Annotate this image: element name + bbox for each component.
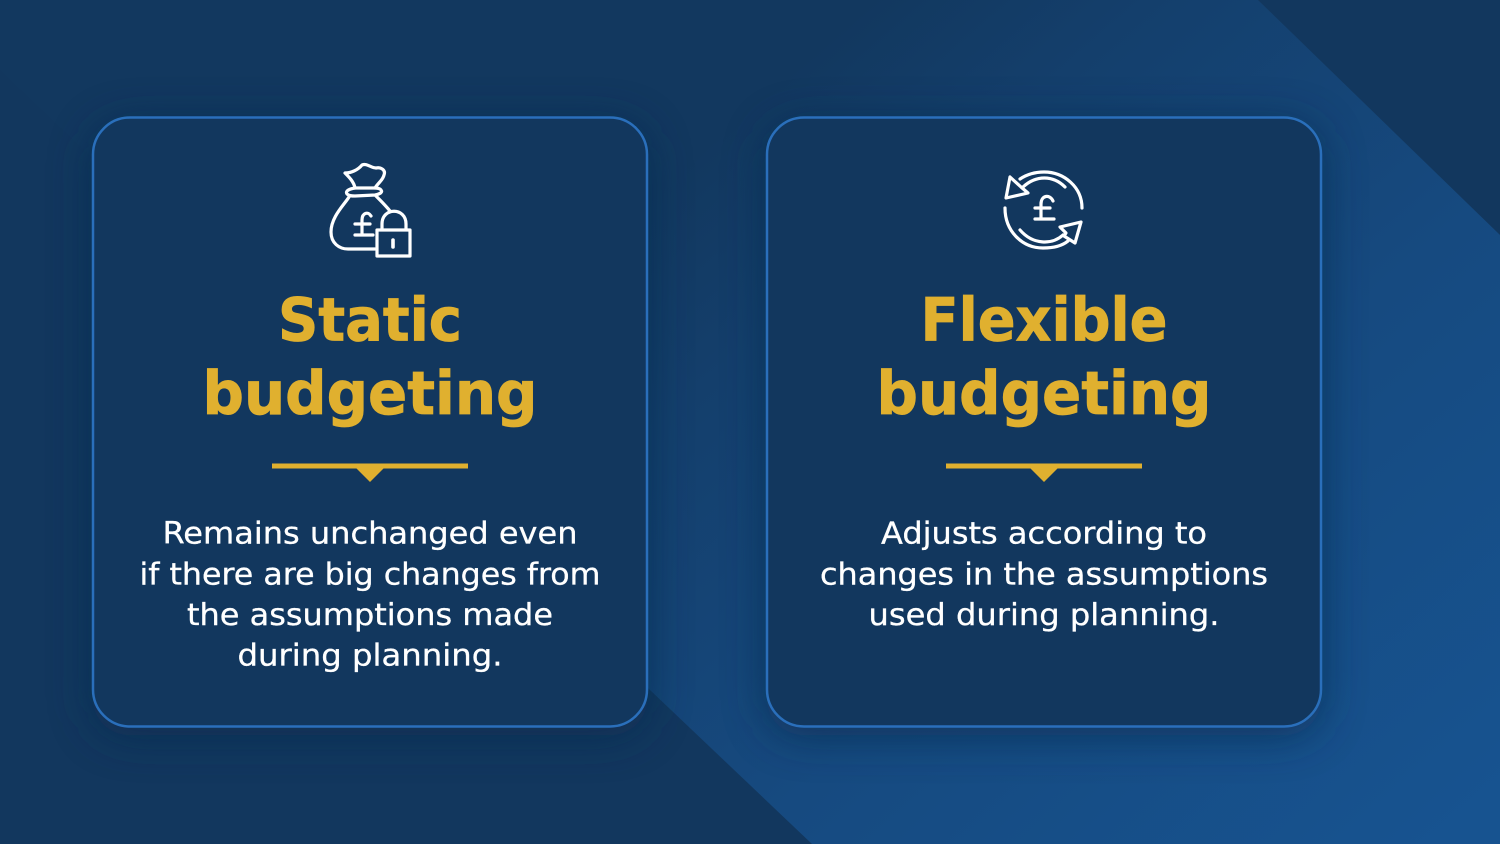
heading: budgeting xyxy=(202,359,538,429)
divider with pointer xyxy=(946,464,1142,482)
description: if there are big changes from xyxy=(140,558,600,592)
heading xyxy=(202,286,538,429)
heading: Flexible xyxy=(920,286,1168,356)
heading: budgeting xyxy=(876,359,1212,429)
icon: circular arrows with pound xyxy=(1005,172,1082,248)
description xyxy=(140,516,600,674)
heading xyxy=(876,286,1212,429)
description: the assumptions made xyxy=(187,598,553,633)
description: used during planning. xyxy=(868,598,1220,633)
card outline xyxy=(93,118,647,726)
description: Adjusts according to xyxy=(881,516,1207,552)
description: during planning. xyxy=(238,638,502,674)
card shadows xyxy=(93,125,1321,735)
description: Remains unchanged even xyxy=(162,516,578,552)
icon: money bag with padlock xyxy=(331,165,410,256)
description: changes in the assumptions xyxy=(820,558,1268,592)
divider with pointer xyxy=(272,464,468,482)
card outline xyxy=(767,118,1321,726)
description xyxy=(820,516,1268,633)
heading: Static xyxy=(278,286,462,356)
panel: flexible budgeting xyxy=(767,118,1321,726)
panel: static budgeting xyxy=(93,118,647,726)
